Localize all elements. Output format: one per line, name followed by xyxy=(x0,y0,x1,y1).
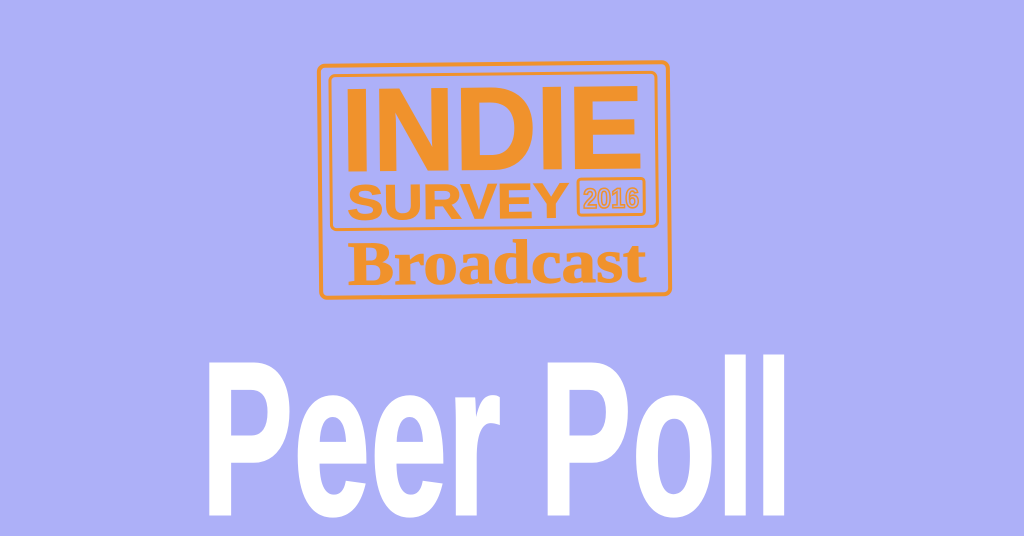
outer frame xyxy=(319,62,670,298)
SURVEY text: SURVEY xyxy=(347,174,570,231)
INDIE text: INDIE xyxy=(341,61,644,196)
inner frame xyxy=(330,72,657,230)
Broadcast text: Broadcast xyxy=(348,227,647,299)
2016 badge: 2016 xyxy=(583,182,639,214)
logo: Indie Survey 2016 Broadcast stamp xyxy=(319,61,670,299)
